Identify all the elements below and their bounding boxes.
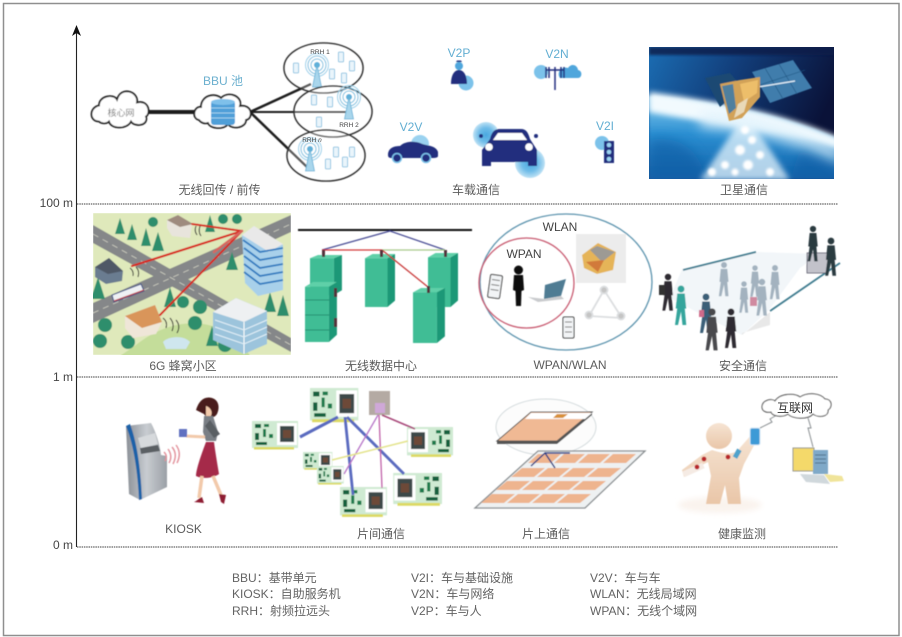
legend column 3: WLAN：无线局域网 — [590, 587, 697, 601]
icon: V2N antenna and cloud — [534, 65, 581, 90]
axis label: 100 m: 100 m — [40, 196, 73, 210]
icon: NFC waves — [164, 445, 179, 464]
ceiling reflector bar — [298, 229, 472, 231]
chip boards — [252, 388, 453, 517]
passengers — [719, 262, 780, 316]
panel: vehicular communication — [388, 46, 614, 197]
icon: laptop — [528, 279, 566, 302]
panel: security communication — [659, 226, 840, 373]
magnified chip tile — [497, 412, 592, 444]
distance gridlines — [77, 204, 838, 547]
legend column 1: KIOSK：自助服务机 — [232, 586, 341, 601]
label: BBU pool: BBU 池 — [203, 74, 243, 88]
label: internet: 互联网 — [777, 401, 813, 415]
label: RRH n: RRH n — [302, 137, 322, 144]
label: WPAN: WPAN — [506, 247, 542, 261]
legend column 3 — [590, 570, 697, 618]
label: WLAN: WLAN — [543, 220, 577, 234]
label: V2I: V2I — [596, 119, 614, 133]
panel: satellite communication — [649, 47, 840, 197]
icon: phone in WLAN — [563, 317, 574, 338]
RRH n coverage cell — [287, 130, 365, 181]
label: RRH 2: RRH 2 — [339, 122, 359, 129]
scanner station — [807, 226, 836, 276]
photo: satellite over Earth — [649, 47, 840, 180]
icon: V2P person — [451, 60, 474, 90]
icon: kiosk terminal — [126, 423, 167, 500]
vertical distance axis — [72, 25, 81, 547]
caption: satellite communication: 卫星通信 — [720, 183, 768, 197]
label: V2V: V2V — [400, 120, 422, 134]
apartment block — [212, 310, 268, 354]
panel: WPAN and WLAN — [479, 214, 652, 372]
icon: core network cloud: 核心网 — [107, 107, 135, 118]
RRH 1 coverage cell — [284, 43, 363, 93]
legend column 2 — [411, 570, 513, 618]
wireless links — [322, 231, 445, 287]
panel: wireless backhaul and fronthaul — [92, 43, 372, 197]
icon: smartphone — [750, 428, 760, 445]
panel: 6G cellular cell — [91, 213, 291, 373]
icon: core network cloud — [92, 91, 149, 128]
chip grid — [475, 451, 645, 508]
caption: KIOSK: KIOSK — [165, 522, 202, 536]
icon: BBU pool cloud with database — [194, 94, 251, 128]
illustration: city cell with THz beams — [91, 213, 291, 356]
axis label: 0 m: 0 m — [53, 538, 73, 552]
houses — [166, 220, 192, 238]
WLAN boundary — [480, 214, 652, 350]
icon: access point triangle — [586, 286, 624, 320]
label: V2P: V2P — [448, 46, 470, 60]
legend column 2: V2I：车与基础设施 — [411, 570, 513, 585]
WPAN boundary — [479, 238, 574, 328]
legend column 2: V2P：车与人 — [411, 603, 482, 618]
THz beams — [132, 224, 242, 315]
wireless links — [760, 412, 813, 447]
axis label: 1 m: 1 m — [53, 370, 73, 384]
icon: router room — [576, 234, 626, 283]
panel: chip-to-chip communication — [252, 388, 453, 541]
icon: woman with card — [179, 398, 226, 504]
bus — [112, 284, 144, 302]
legend column 3: V2V：车与车 — [590, 570, 661, 585]
icon: phone in WPAN — [488, 274, 503, 299]
RRH 2 coverage cell — [294, 86, 372, 137]
icon: 3D figure with sensors — [678, 423, 762, 513]
caption: vehicular communication: 车载通信 — [452, 182, 500, 197]
legend column 1: BBU：基带单元 — [232, 571, 317, 585]
panel: health monitoring — [678, 394, 844, 541]
wireless links — [300, 415, 415, 495]
server racks — [305, 253, 458, 343]
panel: KIOSK — [126, 398, 226, 536]
icon: desktop computer — [793, 448, 844, 484]
panel: on-chip communication — [475, 399, 645, 541]
label: RRH 1: RRH 1 — [310, 49, 330, 56]
legend column 3: WPAN：无线个域网 — [590, 604, 697, 618]
caption: health monitoring: 健康监测 — [718, 526, 766, 541]
caption: WPAN/WLAN: WPAN/WLAN — [533, 358, 607, 372]
caption: on-chip: 片上通信 — [522, 527, 570, 541]
caption: chip-to-chip: 片间通信 — [357, 527, 405, 541]
label: V2N: V2N — [545, 47, 569, 61]
zoom lens outline — [496, 399, 596, 455]
icon: V2V car — [388, 135, 438, 162]
panel: wireless data center — [298, 230, 472, 373]
caption: 6G cell: 6G 蜂窝小区 — [149, 358, 217, 373]
tall office tower — [242, 228, 283, 296]
caption: security communication: 安全通信 — [719, 358, 767, 373]
scanned corridor — [670, 252, 820, 335]
icon: internet cloud — [762, 394, 831, 418]
icon: user silhouette — [513, 266, 524, 306]
legend column 2: V2N：车与网络 — [411, 586, 494, 601]
legend: abbreviations — [232, 570, 697, 618]
legend column 1 — [232, 571, 341, 618]
icon: V2I traffic light — [595, 136, 614, 163]
link lines — [148, 84, 346, 168]
caption: wireless backhaul: 无线回传 / 前传 — [178, 182, 261, 197]
icon: main vehicle — [473, 122, 545, 178]
trees — [91, 214, 289, 352]
caption: wireless data center: 无线数据中心 — [345, 358, 417, 373]
legend column 1: RRH：射频拉远头 — [232, 603, 330, 618]
